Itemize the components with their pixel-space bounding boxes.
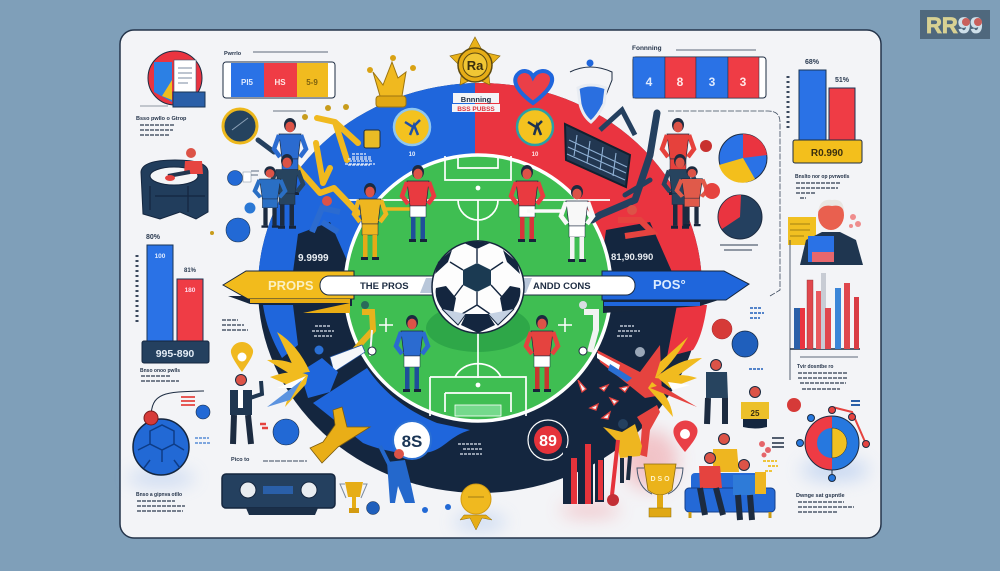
left bar chart xyxy=(137,234,209,363)
left bar chart: 100 xyxy=(155,253,166,260)
player: red bottom xyxy=(526,315,558,392)
table: top left xyxy=(223,51,335,98)
banner: blue POS: POS° xyxy=(653,277,686,292)
icon: crown xyxy=(367,55,416,107)
red and white fragments xyxy=(578,380,629,419)
banner: yellow PROPS xyxy=(223,271,354,313)
medal: star xyxy=(450,37,500,85)
pie chart: bottom xyxy=(718,195,762,239)
person: yellow jersey 25: 25 xyxy=(751,409,760,418)
navy ring base xyxy=(258,83,702,493)
blue ball dot xyxy=(244,202,256,214)
field markings xyxy=(347,156,610,416)
text block: yellow zone caption xyxy=(345,154,375,164)
caption: Pico to: Pico to xyxy=(231,457,250,463)
person: man with documents xyxy=(788,200,863,265)
bars: black and red xyxy=(563,433,604,504)
goal net xyxy=(455,405,501,416)
inner small text xyxy=(312,157,640,454)
table: top right: 4 xyxy=(646,75,653,89)
logo: RR99: 99 xyxy=(958,13,982,38)
caption: right mid: Bnslto nor op pvrwotls xyxy=(795,174,850,180)
person: navy xyxy=(664,154,696,229)
table: top left: 5-9 xyxy=(306,78,318,87)
pie chart: top xyxy=(719,134,767,183)
blue ball xyxy=(226,218,250,242)
left bar chart: 80% xyxy=(146,234,161,241)
icon: foam hand xyxy=(310,407,370,463)
dashed connector xyxy=(668,111,780,296)
blue dots xyxy=(422,504,451,513)
icon: heart xyxy=(515,71,552,103)
caption: bottom left xyxy=(136,492,185,511)
logo: RR99: RR xyxy=(926,13,958,38)
icon: magnifier xyxy=(223,109,274,152)
blue ball small lower xyxy=(273,419,299,445)
caption tiny xyxy=(195,438,211,443)
caption: bottom left: Bnso a gipnva otllo xyxy=(136,492,182,498)
player: red top right xyxy=(511,165,543,242)
caption: right lower xyxy=(797,357,858,389)
caption: top left: Bsso pwllo o Gtrop xyxy=(136,116,187,122)
bar chart: right lower xyxy=(790,240,860,380)
icon: shield xyxy=(570,60,612,122)
ball: small trophy side xyxy=(366,502,380,514)
table: top left: PI5 xyxy=(241,78,254,87)
ball: red right xyxy=(787,398,801,412)
red lines xyxy=(181,397,195,405)
ball: small blue xyxy=(196,405,210,419)
person: yellow fan xyxy=(603,419,642,483)
central circular diagram xyxy=(240,70,715,493)
table: top left: Pwrrlo xyxy=(224,51,242,57)
figure: blue sliding xyxy=(312,196,340,232)
small dashes right xyxy=(749,308,764,369)
score circle: 89: 89 xyxy=(539,433,557,450)
icon: small trophy xyxy=(340,482,367,513)
lower left blue strip xyxy=(263,305,298,358)
left bar chart: 81% xyxy=(184,268,197,274)
icon: keyboard on stand xyxy=(565,110,635,187)
icon: big trophy xyxy=(637,464,683,517)
soft glows xyxy=(127,430,869,529)
person: dark man xyxy=(271,154,303,229)
player: blue bottom xyxy=(396,315,428,392)
main panel xyxy=(120,30,881,538)
icon: cylinder machine with person xyxy=(141,148,208,219)
badge: left crest: 10 xyxy=(409,152,416,158)
field xyxy=(345,155,611,421)
center top label xyxy=(452,93,500,113)
pill: AND CONS xyxy=(515,276,635,295)
person: blue xyxy=(255,166,285,228)
caption: left mid xyxy=(140,368,180,381)
score circle: 8S: 8S xyxy=(402,432,422,451)
right bar chart top: 68% xyxy=(805,59,820,66)
caption: top left xyxy=(136,106,187,135)
right bar chart top: R0.990 xyxy=(811,148,844,159)
yellow dots xyxy=(210,104,349,235)
score circle: 89 xyxy=(528,420,568,460)
pill: AND CONS: ANDD CONS xyxy=(533,281,591,292)
icon: big trophy: D S O xyxy=(650,476,670,483)
red specks xyxy=(260,424,268,428)
ball shadow xyxy=(426,304,530,352)
soccer ball xyxy=(432,241,524,333)
legend mark xyxy=(851,401,860,405)
zigzag: yellow left xyxy=(297,118,358,213)
banner: blue POS xyxy=(602,271,749,313)
left bar chart: 180 xyxy=(185,287,196,294)
center top label: Bnnning xyxy=(461,95,492,104)
stick and ball xyxy=(607,440,619,506)
table: top right: 3 xyxy=(709,75,716,89)
badge: right crest: 10 xyxy=(532,152,539,158)
caption near bars xyxy=(222,320,248,330)
red foam hand xyxy=(637,405,660,457)
badge: right crest xyxy=(517,109,553,158)
icon: cassette deck xyxy=(222,474,335,515)
table: top right: Fonnning xyxy=(632,45,662,52)
central circular diagram: 81,90.990 xyxy=(611,252,653,263)
lower right red strip xyxy=(667,305,707,357)
person: seated blue xyxy=(380,446,415,503)
medal: star: Ra xyxy=(467,58,484,73)
icon: red pin xyxy=(673,420,698,452)
person: red xyxy=(677,166,707,226)
badge: left crest xyxy=(394,109,430,158)
score circle: 8S xyxy=(393,421,431,459)
small yellow tag xyxy=(364,130,380,148)
person: coach xyxy=(230,374,262,444)
player: yellow left small xyxy=(355,301,393,356)
caption: right lower: Tvir dosntbe ro xyxy=(797,364,833,370)
player: white xyxy=(527,185,593,262)
person: yellow jersey 25 xyxy=(741,386,769,428)
left bar chart: 995-890 xyxy=(156,348,194,360)
big blue ball xyxy=(133,391,204,475)
text lines near pie xyxy=(720,245,758,250)
red swirl with lines xyxy=(759,438,784,458)
arrow xyxy=(273,110,306,112)
icon: report pie xyxy=(148,51,205,107)
caption: bottom right xyxy=(796,493,854,512)
small blue ball with tag xyxy=(228,170,259,186)
circular ring chart xyxy=(796,406,870,482)
logo: RR99 xyxy=(920,10,990,39)
caption: right mid xyxy=(795,174,850,198)
caption: bottom right: Dwnge sat gspntle xyxy=(796,493,845,499)
right bar chart top xyxy=(788,59,862,163)
player: yellow xyxy=(354,183,420,260)
person: blue arm up xyxy=(274,118,306,195)
center top label: BSS PUBSS xyxy=(457,106,495,113)
player: red top left xyxy=(402,165,434,242)
pill: THE PROS: THE PROS xyxy=(360,281,409,292)
icon: yellow pin xyxy=(231,342,253,372)
red balls xyxy=(700,140,720,199)
labels in ring: 9.9999 xyxy=(298,253,329,264)
upper halves xyxy=(258,83,702,270)
caption: left mid: Bnso onoo pwlls xyxy=(140,368,180,374)
person: red arm up xyxy=(662,118,694,195)
wings: blue yellow xyxy=(267,332,365,407)
table: top left: HS xyxy=(274,78,286,87)
table: top right: 8 xyxy=(677,75,684,89)
yellow specks xyxy=(763,461,778,471)
medal: ribbon xyxy=(460,484,492,530)
figure: red sliding xyxy=(618,205,652,236)
navy wedges xyxy=(293,222,352,272)
caption: Pico to xyxy=(231,457,307,463)
lower blue band xyxy=(313,368,470,454)
person: standing man xyxy=(706,360,728,424)
pill: THE PROS xyxy=(320,276,445,295)
player: white right small xyxy=(558,301,596,355)
balls right xyxy=(712,319,758,357)
wings: red yellow xyxy=(597,337,702,417)
banner: yellow PROPS: PROPS xyxy=(268,278,314,293)
right bar chart top: 51% xyxy=(835,77,850,84)
couch with fans xyxy=(685,434,775,520)
table: top right xyxy=(632,45,766,98)
zigzag: navy right xyxy=(592,113,657,220)
table: top right: 3 xyxy=(740,75,747,89)
